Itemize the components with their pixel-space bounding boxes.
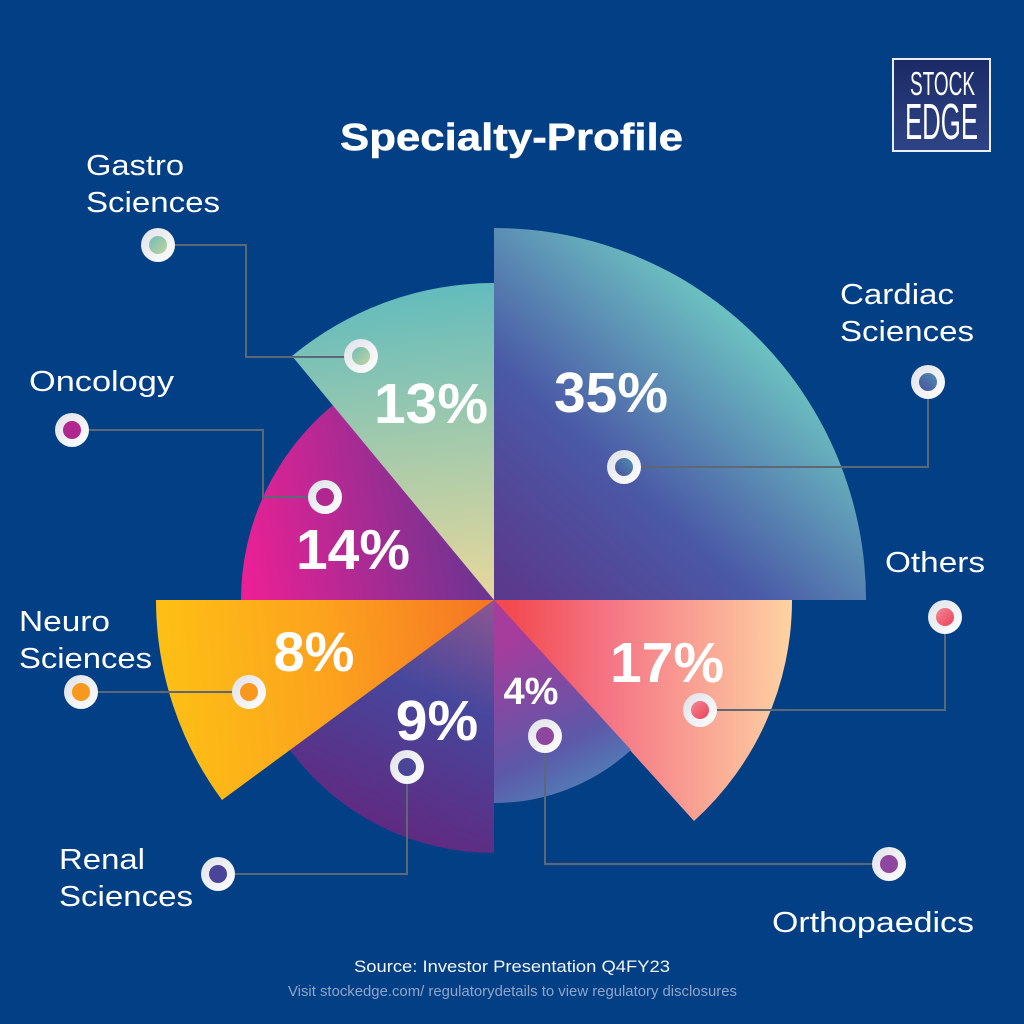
- label: Oncology: Oncology: [29, 366, 175, 398]
- label: Neuro Sciences: Sciences: [19, 643, 152, 675]
- marker: Gastro outer: [141, 228, 175, 262]
- label: Renal Sciences: Sciences: [59, 881, 193, 913]
- value: 4%: 4%: [504, 671, 558, 713]
- value: 17%: 17%: [610, 631, 724, 695]
- logo: StockEdge: [893, 59, 990, 151]
- marker: Renal outer: [201, 857, 235, 891]
- markers: [55, 228, 962, 891]
- value: 14%: 14%: [296, 518, 410, 582]
- percentages: [274, 361, 724, 753]
- label: Neuro Sciences: [19, 606, 152, 675]
- label: Cardiac Sciences: [840, 279, 974, 348]
- slice: Cardiac Sciences 35%: [494, 228, 866, 600]
- label: Gastro Sciences: Gastro: [86, 150, 184, 182]
- connector lines: [88, 245, 945, 874]
- value: 8%: 8%: [274, 620, 354, 683]
- labels: [19, 150, 985, 939]
- label: Gastro Sciences: [86, 150, 220, 219]
- marker: Others outer: [928, 600, 962, 634]
- marker: Orthopaedics outer: [872, 847, 906, 881]
- marker: Others inner: [683, 693, 717, 727]
- label: Others: Others: [885, 547, 985, 579]
- label: Orthopaedics: Orthopaedics: [772, 907, 974, 939]
- marker: Oncology inner: [308, 480, 342, 514]
- label: Renal Sciences: [59, 844, 193, 913]
- label: Cardiac Sciences: Cardiac: [840, 279, 954, 311]
- marker: Cardiac outer: [911, 365, 945, 399]
- pie chart: specialty profile: [156, 228, 866, 853]
- marker: Gastro inner: [344, 339, 378, 373]
- title: Specialty-Profile: [340, 117, 683, 159]
- slice: Oncology 14%: [241, 405, 494, 600]
- value: 35%: 35%: [554, 361, 668, 425]
- marker: Oncology outer: [55, 413, 89, 447]
- slice: Renal Sciences 9%: [290, 600, 494, 853]
- slice: Neuro Sciences 8%: [156, 600, 494, 800]
- label: Gastro Sciences: Sciences: [86, 187, 220, 219]
- regulatory disclosure: Visit stockedge.com/ regulatorydetails to view regulatory disclosures: [288, 984, 737, 1000]
- logo: StockEdge: STOCK: [910, 65, 975, 102]
- label: Cardiac Sciences: Sciences: [840, 316, 974, 348]
- slice: Others 17%: [494, 600, 792, 821]
- marker: Renal inner: [390, 750, 424, 784]
- source line: Source: Investor Presentation Q4FY23: [354, 958, 670, 976]
- value: 13%: 13%: [374, 372, 488, 436]
- marker: Neuro outer: [64, 675, 98, 709]
- slice: Orthopaedics 4%: [494, 600, 631, 803]
- marker: Neuro inner: [232, 675, 266, 709]
- marker: Orthopaedics inner: [528, 719, 562, 753]
- value: 9%: 9%: [396, 689, 478, 753]
- marker: Cardiac inner: [607, 450, 641, 484]
- label: Neuro Sciences: Neuro: [19, 606, 110, 638]
- label: Renal Sciences: Renal: [59, 844, 145, 876]
- slice: Gastro Sciences 13%: [292, 283, 494, 600]
